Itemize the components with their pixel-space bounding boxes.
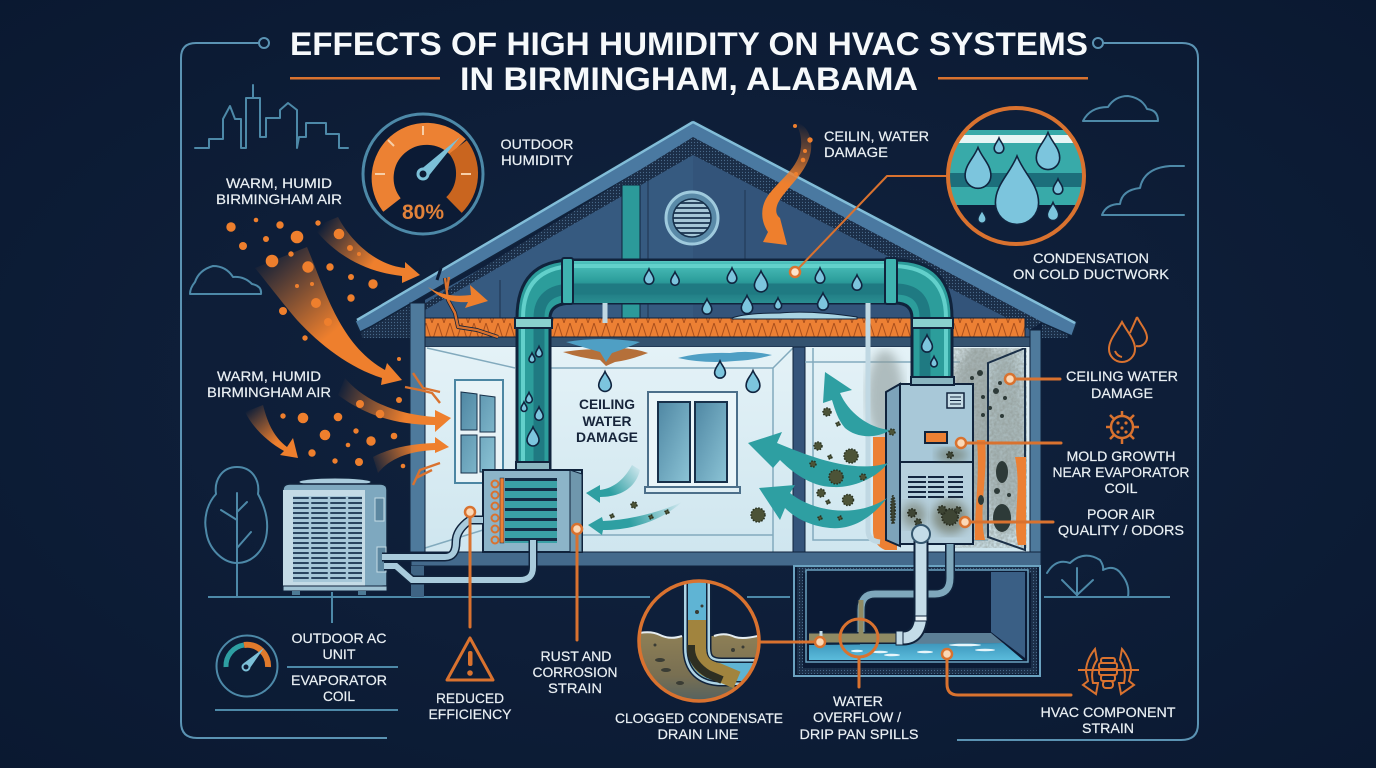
label: mold growth: COIL	[1104, 480, 1138, 496]
label: ceiling water damage inside room: DAMAGE	[576, 429, 638, 445]
label: outdoor AC unit and evaporator coil: COIL	[323, 688, 355, 704]
room interior	[425, 347, 1033, 552]
label: reduced efficiency: EFFICIENCY	[428, 706, 512, 722]
label: ceiling water damage top: DAMAGE	[824, 144, 888, 160]
outdoor AC unit	[283, 478, 387, 595]
stem: outdoor AC leader	[331, 592, 333, 623]
floor beam	[411, 552, 1041, 566]
right room back wall	[805, 348, 988, 540]
label: ceiling water damage right: DAMAGE	[1091, 385, 1153, 401]
ceiling beam	[413, 337, 1041, 347]
clogged condensate drain magnifier	[637, 579, 761, 703]
label: ceiling water damage right: CEILING WATER	[1066, 368, 1178, 384]
title	[290, 26, 1088, 97]
label: outdoor AC unit and evaporator coil: UNIT	[322, 646, 356, 662]
label: outdoor AC unit and evaporator coil	[215, 630, 398, 710]
label: ceiling water damage inside room: CEILING	[579, 396, 635, 412]
label: water overflow: WATER	[833, 693, 883, 709]
label: warm humid air lower: BIRMINGHAM AIR	[207, 384, 331, 400]
label: HVAC component strain: HVAC COMPONENT	[1040, 704, 1176, 720]
humidity dots	[226, 218, 405, 468]
mold spores	[610, 408, 895, 522]
label: rust and corrosion strain: RUST AND	[540, 648, 612, 664]
label: clogged condensate drain line: DRAIN LINE	[658, 726, 738, 742]
ground line	[208, 596, 1170, 598]
label: warm humid air lower	[207, 368, 331, 400]
condensation droplets	[521, 268, 937, 446]
icon: HVAC component strain	[1078, 649, 1139, 694]
room perspective lines	[425, 348, 793, 552]
title: EFFECTS OF HIGH HUMIDITY ON HVAC SYSTEMS	[290, 26, 1088, 62]
label: clogged condensate drain line: CLOGGED CONDENSATE	[615, 710, 783, 726]
infographic canvas	[180, 32, 1199, 741]
vertical teal pipe	[622, 185, 640, 337]
label: rust and corrosion strain: STRAIN	[548, 680, 602, 696]
label: reduced efficiency: REDUCED	[436, 690, 504, 706]
icon: small cloud left	[190, 266, 261, 294]
label: warm humid air top	[216, 175, 342, 207]
side window	[455, 380, 503, 483]
teal indoor airflow arrows	[586, 372, 890, 535]
leader: air quality	[960, 517, 1053, 527]
crack orange lines	[405, 277, 498, 485]
outer frame	[181, 38, 1198, 740]
label: poor air quality	[1058, 506, 1184, 538]
leader: rust and corrosion	[572, 524, 582, 640]
refrigerant lines	[382, 520, 533, 580]
label: poor air quality: QUALITY / ODORS	[1058, 522, 1184, 538]
eave soffits	[361, 300, 410, 338]
basement and drain piping	[794, 525, 1040, 676]
label: outdoor humidity	[500, 136, 574, 168]
label: water overflow: DRIP PAN SPILLS	[800, 726, 918, 742]
label: rust and corrosion strain	[532, 648, 618, 696]
leader: furnace mold	[956, 438, 1061, 448]
ceiling water stains and drips	[563, 312, 857, 392]
label: warm humid air top: WARM, HUMID	[226, 175, 332, 191]
icon: clouds right	[1083, 96, 1184, 215]
furnace air handler	[886, 384, 973, 546]
icon: tree	[205, 467, 267, 597]
label: ceiling water damage right	[1066, 368, 1178, 401]
ceiling arrow dots	[793, 124, 813, 176]
insulation	[425, 318, 1025, 337]
label: warm humid air lower: WARM, HUMID	[217, 368, 321, 384]
divider wall	[793, 347, 805, 552]
roof	[355, 120, 1077, 336]
icon: city skyline	[195, 85, 348, 148]
label: mold growth	[1052, 448, 1190, 496]
label: condensation on cold ductwork: CONDENSATION	[1033, 250, 1149, 266]
orange air arrows outside	[245, 217, 451, 473]
magnified condensation callout	[945, 108, 1090, 244]
ceiling arrow	[762, 122, 811, 245]
gauge: outdoor humidity 80%: 80%	[402, 201, 444, 224]
label: ceiling water damage inside room: WATER	[582, 413, 632, 429]
floor drain pipes	[861, 544, 950, 634]
leader: condensation	[790, 176, 947, 277]
gauge: outdoor humidity 80%	[363, 114, 483, 234]
wall cracks	[445, 278, 498, 337]
label: clogged condensate drain line	[615, 710, 783, 742]
furnace mold	[891, 448, 968, 534]
ductwork with condensation	[515, 258, 954, 542]
label: HVAC component strain: STRAIN	[1082, 720, 1134, 736]
label: outdoor AC unit and evaporator coil: OUTDOOR AC	[292, 630, 386, 646]
label: mold growth: NEAR EVAPORATOR	[1052, 464, 1190, 480]
leader: reduced efficiency	[465, 507, 475, 627]
label: ceiling water damage top	[824, 128, 929, 160]
label: rust and corrosion strain: CORROSION	[532, 664, 618, 680]
label: outdoor humidity: HUMIDITY	[501, 152, 574, 168]
leader: clogged drain	[760, 637, 825, 647]
left wall	[410, 303, 425, 552]
label: outdoor AC unit and evaporator coil: EVAPORATOR	[291, 672, 387, 688]
leader: water to HVAC strain	[942, 649, 1071, 695]
overflow highlight circle and leader	[840, 619, 878, 687]
label: water overflow	[800, 693, 918, 742]
leader: wall mold	[1005, 374, 1060, 384]
label: reduced efficiency	[428, 690, 512, 722]
duct collars	[562, 258, 573, 304]
label: warm humid air top: BIRMINGHAM AIR	[216, 191, 342, 207]
support rods	[605, 303, 880, 542]
icon: mold spore	[1106, 411, 1139, 444]
attic wall	[425, 150, 1030, 340]
air arrow through crack	[428, 285, 488, 308]
icon: orange water drops	[1109, 317, 1147, 362]
label: mold growth: MOLD GROWTH	[1066, 448, 1176, 464]
back window	[645, 392, 740, 493]
label: outdoor humidity: OUTDOOR	[500, 136, 574, 152]
label: poor air quality: POOR AIR	[1087, 506, 1155, 522]
label: ceiling water damage inside room	[576, 396, 638, 445]
label: condensation on cold ductwork: ON COLD DUCTWORK	[1013, 266, 1170, 282]
gauge: small AC gauge	[216, 636, 278, 696]
label: water overflow: OVERFLOW /	[813, 709, 901, 725]
attic vent	[666, 192, 718, 244]
mold growth on right room wall	[867, 340, 1027, 550]
label: condensation on cold ductwork	[1013, 250, 1170, 282]
title: IN BIRMINGHAM, ALABAMA	[460, 61, 918, 97]
label: ceiling water damage top: CEILIN, WATER	[824, 128, 929, 144]
icon: small tree bush	[1047, 556, 1128, 597]
icon: warning triangle	[447, 638, 493, 680]
indoor evaporator coil	[483, 470, 582, 552]
label: HVAC component strain	[1040, 704, 1176, 736]
house structure	[355, 120, 1077, 597]
right wall	[1030, 330, 1041, 552]
